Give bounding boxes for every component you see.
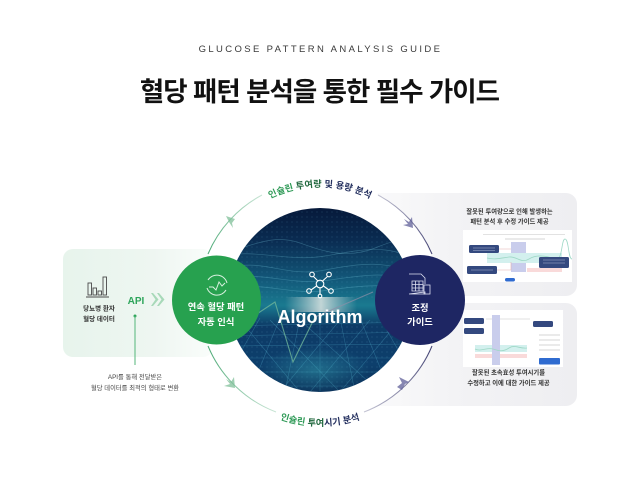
subtitle: GLUCOSE PATTERN ANALYSIS GUIDE: [199, 44, 442, 55]
mesh waves: [240, 239, 399, 292]
title: 혈당 패턴 분석을 통한 필수 가이드: [140, 77, 500, 107]
dotted mesh: [242, 212, 398, 298]
label: Algorithm: Algorithm: [278, 307, 362, 327]
icon: cycle pulse: [207, 275, 227, 295]
chart screenshot 2: [463, 310, 563, 367]
algorithm orb: [236, 208, 402, 392]
ring: navy arcs: [364, 195, 432, 412]
node: continuous glucose pattern recognition: [172, 256, 261, 344]
panel: timing guide: [370, 303, 577, 406]
white disc behind ring: [200, 180, 440, 420]
text: patient glucose data: 혈당 데이터: [83, 314, 115, 323]
text: node label: 자동 인식: [198, 316, 234, 327]
text: dose guide caption: 패턴 분석 후 수정 가이드 제공: [470, 216, 549, 226]
panel: dose guide: [370, 193, 577, 296]
curved label: timing analysis: 인슐린 투여시기 분석: [282, 412, 360, 427]
text: patient glucose data: [83, 304, 115, 323]
ring: green arcs: [208, 195, 276, 412]
icon: chevrons: [151, 293, 164, 306]
connector line: [134, 314, 136, 365]
icon: document table: [409, 274, 430, 294]
floor grid: [240, 318, 401, 392]
text: timing guide caption: 잘못된 초속효성 투여시기를: [472, 368, 545, 376]
text: node label: 연속 혈당 패턴: [188, 301, 244, 312]
text: node label: 가이드: [407, 316, 433, 327]
caption: API conversion: 혈당 데이터를 최적의 형태로 변환: [91, 383, 179, 392]
icon: network: [307, 272, 333, 298]
curved label: dose analysis: 인슐린 투여량 및 용량 분석: [268, 179, 372, 199]
caption: API conversion: [91, 372, 179, 392]
icon: bar chart: [86, 277, 109, 297]
chart screenshot 1: [463, 230, 572, 282]
text: node label: 조정: [411, 303, 429, 313]
text: timing guide caption: [467, 368, 550, 387]
node: adjustment guide: [375, 255, 465, 345]
text: dose guide caption: [466, 206, 553, 226]
label: API: API: [128, 296, 145, 307]
icon: ring arrowheads: [224, 216, 413, 390]
text: patient glucose data: 당뇨병 환자: [83, 304, 115, 312]
text: node label: [407, 303, 433, 327]
text: node label: [188, 301, 244, 327]
text: dose guide caption: 잘못된 투여량으로 인해 발생하는: [466, 206, 553, 216]
caption: API conversion: API를 통해 전달받은: [108, 372, 162, 381]
centre glow: [285, 297, 357, 312]
panel: patient data via API: [63, 249, 213, 365]
pulse line: [259, 292, 374, 364]
floor glow: [270, 350, 361, 390]
text: timing guide caption: 수정하고 이에 대한 가이드 제공: [467, 378, 550, 387]
